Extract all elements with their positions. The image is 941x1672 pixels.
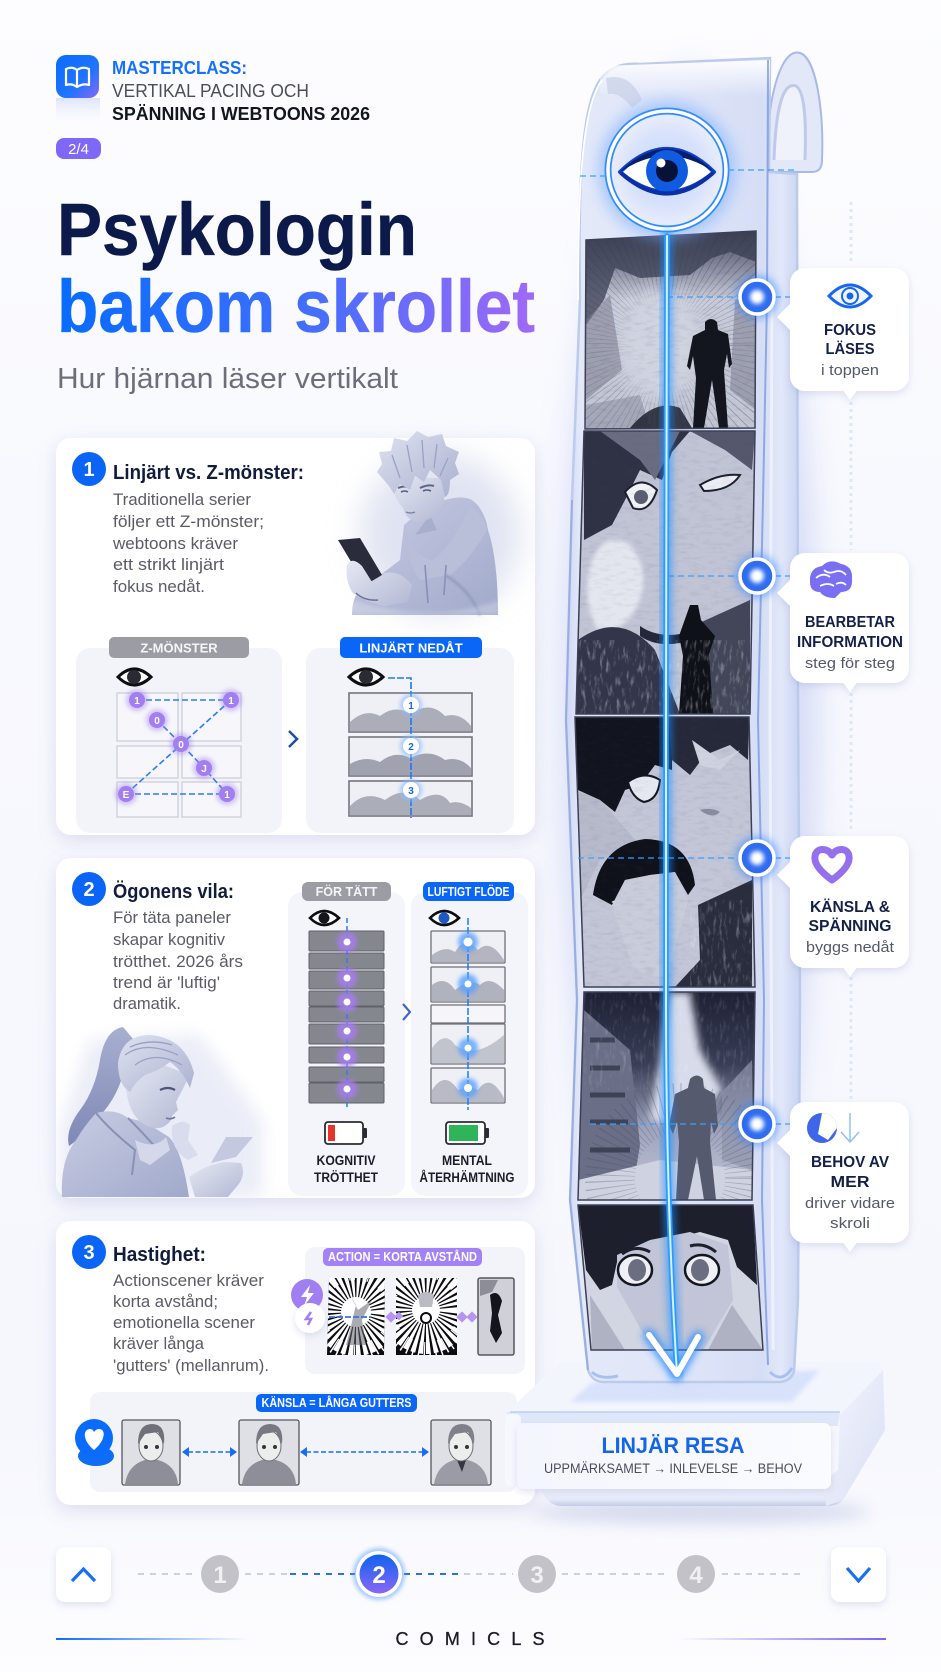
callout: need for more: driver vidare: [805, 1195, 895, 1212]
airy nodes: [458, 932, 478, 1098]
icon: blue heart: [75, 1419, 114, 1466]
body text: Actionscener kräver: [113, 1272, 265, 1290]
header line 2: VERTIKAL PACING OCH: [112, 81, 309, 101]
step 4: [677, 1555, 715, 1593]
body text: För täta paneler: [113, 909, 232, 927]
body text: trötthet. 2026 års: [113, 953, 243, 971]
callout: need for more: [777, 1102, 909, 1252]
Z nodes: E: [123, 790, 130, 801]
diagram: Z-pattern: Z-MÖNSTER: [140, 640, 218, 656]
body text: webtoons kräver: [112, 535, 239, 553]
callout: focus locks: i toppen: [821, 362, 879, 379]
body text: [112, 491, 264, 596]
callout: processing information: BEARBETAR: [805, 614, 895, 631]
heading: Linjärt vs. Z-mönster:: [113, 462, 304, 484]
illustration: girl with phone: [60, 1027, 262, 1197]
comic frame strokes: [575, 231, 763, 1350]
number badge 2: 2: [83, 879, 95, 901]
callout: emotion and tension: SPÄNNING: [808, 918, 892, 935]
diagram: airy flow: [411, 882, 528, 1196]
button: down: [831, 1547, 886, 1602]
icon: brain: [810, 561, 852, 598]
main title: [57, 188, 535, 348]
action panel 1: [327, 1278, 385, 1355]
dashed track: [138, 1573, 805, 1575]
body text: fokus nedåt.: [113, 578, 205, 596]
step 1: [201, 1555, 239, 1593]
callout: processing information: [777, 553, 909, 692]
portrait 3: [431, 1420, 491, 1485]
arrow chevron: [403, 1004, 410, 1020]
callout: processing information: steg för steg: [805, 655, 895, 672]
diagram: linear downward: [306, 637, 514, 833]
comic panel 4: figure in alley: [578, 992, 754, 1200]
Z nodes: 1: [228, 696, 234, 707]
step 3: 3: [530, 1562, 544, 1589]
body text: [113, 1272, 269, 1375]
Z nodes: J: [201, 764, 207, 775]
body text: skapar kognitiv: [113, 931, 226, 949]
stacked thumbnails: [349, 693, 472, 816]
icon: eye: [349, 669, 383, 685]
glowing reading line with arrow: [649, 236, 698, 1374]
label: MENTAL: [442, 1153, 492, 1168]
dense nodes: [337, 932, 357, 1099]
number badge 3: [72, 1235, 106, 1269]
step 2 active: [353, 1548, 405, 1600]
diagram: too dense: FÖR TÄTT: [316, 884, 378, 899]
callout: need for more: skroli: [830, 1215, 870, 1232]
number badge 2: [72, 872, 106, 906]
portrait 2: [239, 1420, 299, 1485]
action panel 3: [478, 1278, 514, 1355]
step 1: 1: [213, 1562, 227, 1589]
footer brand: COMICLS: [396, 1629, 544, 1649]
base label: linear journey: UPPMÄRKSAMET → INLEVELSE → BEHOV: [544, 1461, 802, 1476]
icon: eye: [430, 911, 459, 925]
icon: eye: [118, 669, 151, 685]
icon: eye: [829, 285, 871, 307]
Z nodes: [115, 689, 242, 805]
icon: full battery: [446, 1122, 489, 1144]
linear nodes: 3: [408, 786, 414, 797]
body text: [113, 909, 243, 1013]
panel 3: speed: [56, 1221, 535, 1505]
label: TRÖTTHET: [314, 1170, 379, 1185]
diagram: too dense: [288, 882, 405, 1196]
Z nodes: 0: [154, 716, 160, 727]
base label: linear journey: LINJÄR RESA: [602, 1433, 745, 1458]
Z path: [126, 700, 231, 794]
base label: linear journey: [517, 1423, 831, 1489]
body text: emotionella scener: [113, 1314, 256, 1332]
glass scroll body: [562, 52, 822, 1382]
callout: need for more: MER: [830, 1174, 870, 1191]
step 4: 4: [689, 1562, 703, 1589]
gutter arrows: [182, 1447, 429, 1457]
button: up: [56, 1547, 111, 1602]
body text: kräver långa: [113, 1335, 205, 1353]
label: KOGNITIV: [316, 1153, 376, 1168]
panel 1: linear vs Z-pattern: [56, 431, 535, 835]
arrow chevron: [289, 731, 297, 747]
timeline nodes: [735, 275, 779, 1146]
diagram: emotion long gutters: KÄNSLA = LÅNGA GUTTERS: [262, 1395, 412, 1410]
icon: heart: [815, 849, 849, 880]
diagram: linear downward: LINJÄRT NEDÅT: [359, 640, 463, 656]
comic panel 2: close-up face: [570, 428, 760, 718]
badge: 2/4: 2/4: [68, 141, 89, 158]
body text: dramatik.: [113, 995, 181, 1013]
icon: eye: [310, 911, 339, 925]
icon: low battery: [325, 1122, 367, 1144]
panel: scroll sculpture: [505, 52, 885, 1524]
portrait 1: [122, 1420, 180, 1485]
heading: Hastighet:: [113, 1244, 206, 1266]
airy panel stack: [431, 931, 505, 1103]
callout: focus locks: [777, 268, 909, 400]
Z nodes: 1: [134, 696, 140, 707]
diagram: action short distances: [291, 1247, 525, 1374]
panel grid: [117, 693, 241, 817]
header line 1: MASTERCLASS:: [112, 58, 247, 78]
diagram: airy flow: LUFTIGT FLÖDE: [428, 884, 510, 899]
vertical dotted connector: [850, 202, 852, 1100]
scroll base plinth: [505, 1362, 885, 1524]
linear nodes: 1: [408, 701, 414, 712]
comic panel 1: street silhouette: [586, 232, 756, 428]
body text: ett strikt linjärt: [113, 556, 224, 574]
callout: processing information: INFORMATION: [797, 634, 903, 651]
icon: open book: [56, 55, 100, 124]
eye focus circle: [599, 102, 735, 238]
body text: trend är 'luftig': [113, 974, 220, 992]
main title: Psykologin: [57, 188, 417, 271]
step 2 active: 2: [372, 1562, 386, 1589]
body text: korta avstånd;: [113, 1293, 218, 1311]
callout: emotion and tension: byggs nedåt: [806, 939, 895, 956]
header: masterclass title block: [56, 55, 370, 159]
body text: följer ett Z-mönster;: [113, 513, 264, 531]
Z nodes: 1: [224, 790, 230, 801]
number badge 3: 3: [83, 1242, 95, 1264]
action connectors: [329, 1316, 371, 1318]
diagram: emotion long gutters: [75, 1392, 517, 1492]
callout: emotion and tension: [777, 836, 909, 977]
heading: Ögonens vila:: [113, 880, 234, 903]
dense panel stack: [309, 931, 384, 1103]
Z nodes: 0: [178, 740, 184, 751]
badge: 2/4: [56, 138, 101, 159]
diagram: action short distances: ACTION = KORTA AVSTÅND: [328, 1249, 477, 1264]
comic panel 5: wide-eyed face: [575, 1202, 767, 1352]
callout: focus locks: FOKUS: [824, 322, 876, 339]
icon: half circle and arrow: [807, 1113, 859, 1143]
step 3: [518, 1555, 556, 1593]
main title: bakom skrollet: [57, 265, 535, 348]
callout: need for more: BEHOV AV: [811, 1154, 890, 1171]
linear nodes: [400, 694, 422, 801]
subtitle: Hur hjärnan läser vertikalt: [57, 363, 398, 395]
comic panel 3: two faces: [570, 714, 760, 990]
navigation: [56, 1547, 886, 1602]
body text: 'gutters' (mellanrum).: [113, 1357, 269, 1375]
label: ÅTERHÄMTNING: [420, 1170, 514, 1185]
horizontal dashed guide lines: [578, 170, 796, 1124]
diagram: Z-pattern: [76, 637, 282, 833]
body text: Traditionella serier: [113, 491, 252, 509]
panel 2: eye rest: [56, 858, 535, 1198]
header line 3: SPÄNNING I WEBTOONS 2026: [112, 104, 370, 124]
callout: focus locks: LÄSES: [826, 341, 874, 358]
number badge 1: [72, 452, 106, 486]
action panel 2: [396, 1278, 457, 1355]
number badge 1: 1: [83, 459, 95, 481]
illustration: boy with phone: [338, 431, 520, 615]
label: [314, 1153, 379, 1185]
linear nodes: 2: [408, 742, 414, 753]
callout: emotion and tension: KÄNSLA &: [810, 899, 890, 916]
label: [420, 1153, 514, 1185]
icon: lightning: [291, 1279, 325, 1333]
